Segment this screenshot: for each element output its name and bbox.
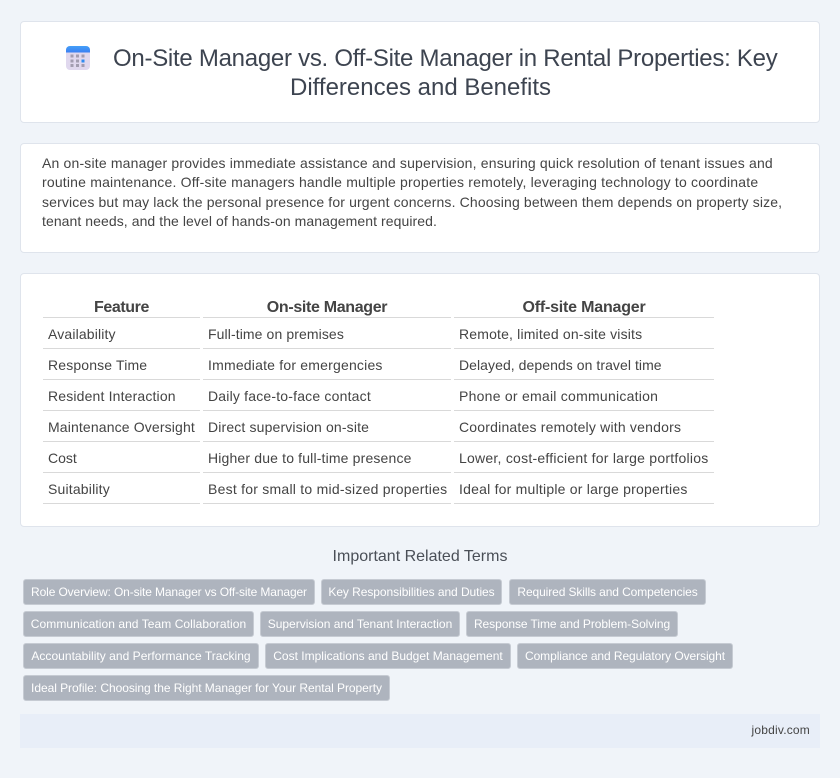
table header: Off-site Manager xyxy=(522,299,646,316)
tags: related terms: Role Overview: On-site Manager vs Off-site Manager xyxy=(31,585,307,599)
tags: related terms xyxy=(23,579,733,701)
row: maintenance oversight: Direct supervision on-site xyxy=(208,419,369,435)
text block: intro: An on-site manager provides immediate assistance and supervision, ensuring quick resolution of tenant issues and xyxy=(42,155,773,171)
panel: comparison table xyxy=(20,273,820,527)
tags: related terms: Communication and Team Collaboration xyxy=(31,617,246,631)
table body xyxy=(43,317,714,504)
row: response time xyxy=(43,348,714,373)
row: suitability xyxy=(43,472,714,504)
row: resident interaction xyxy=(43,379,714,404)
tags: related terms: Accountability and Performance Tracking xyxy=(31,649,251,663)
row: availability xyxy=(43,317,714,342)
tags: related terms: Supervision and Tenant Interaction xyxy=(268,617,452,631)
row: suitability: Ideal for multiple or large properties xyxy=(459,481,688,497)
row: response time: Delayed, depends on travel time xyxy=(459,357,662,373)
panel: title header xyxy=(20,21,820,123)
title: Differences and Benefits xyxy=(290,74,551,101)
table header: Feature xyxy=(94,299,149,316)
title xyxy=(113,45,778,101)
tags: related terms: Ideal Profile: Choosing the Right Manager for Your Rental Property xyxy=(31,681,382,695)
tags: related terms: Compliance and Regulatory Oversight xyxy=(525,649,725,663)
row: suitability: Suitability xyxy=(48,481,110,497)
row: cost: Cost xyxy=(48,450,77,466)
text block: intro xyxy=(42,155,782,229)
row: resident interaction: Daily face-to-face contact xyxy=(208,388,371,404)
text block: intro: services but may lack the personal presence for urgent concerns. Choosing between them depends on property size, xyxy=(42,194,782,210)
table header xyxy=(94,299,646,316)
row: suitability: Best for small to mid-sized properties xyxy=(208,481,447,497)
icon: calendar xyxy=(66,46,90,70)
row: resident interaction: Resident Interaction xyxy=(48,388,176,404)
footer bar xyxy=(20,714,820,748)
table header: On-site Manager xyxy=(267,299,387,316)
row: maintenance oversight: Maintenance Oversight xyxy=(48,419,195,435)
row: availability: Availability xyxy=(48,326,116,342)
row: cost: Lower, cost-efficient for large portfolios xyxy=(459,450,708,466)
panel: intro paragraph xyxy=(20,143,820,253)
footer source: jobdiv.com xyxy=(752,723,810,737)
tags: related terms: Cost Implications and Budget Management xyxy=(273,649,503,663)
row: cost: Higher due to full-time presence xyxy=(208,450,412,466)
row: cost xyxy=(43,441,714,466)
heading: related terms: Important Related Terms xyxy=(333,548,507,565)
row: availability: Remote, limited on-site visits xyxy=(459,326,642,342)
text block: intro: routine maintenance. Off-site managers handle multiple properties remotely, leveraging technology to coordinate xyxy=(42,174,758,190)
text block: intro: tenant needs, and the level of hands-on management required. xyxy=(42,213,437,229)
title: On-Site Manager vs. Off-Site Manager in Rental Properties: Key xyxy=(113,45,777,72)
row: response time: Immediate for emergencies xyxy=(208,357,383,373)
tags: related terms: Response Time and Problem-Solving xyxy=(474,617,670,631)
row: availability: Full-time on premises xyxy=(208,326,344,342)
row: resident interaction: Phone or email communication xyxy=(459,388,658,404)
tags: related terms: Required Skills and Competencies xyxy=(517,585,698,599)
row: response time: Response Time xyxy=(48,357,147,373)
row: maintenance oversight: Coordinates remotely with vendors xyxy=(459,419,681,435)
row: maintenance oversight xyxy=(43,410,714,435)
tags: related terms: Key Responsibilities and Duties xyxy=(328,585,495,599)
